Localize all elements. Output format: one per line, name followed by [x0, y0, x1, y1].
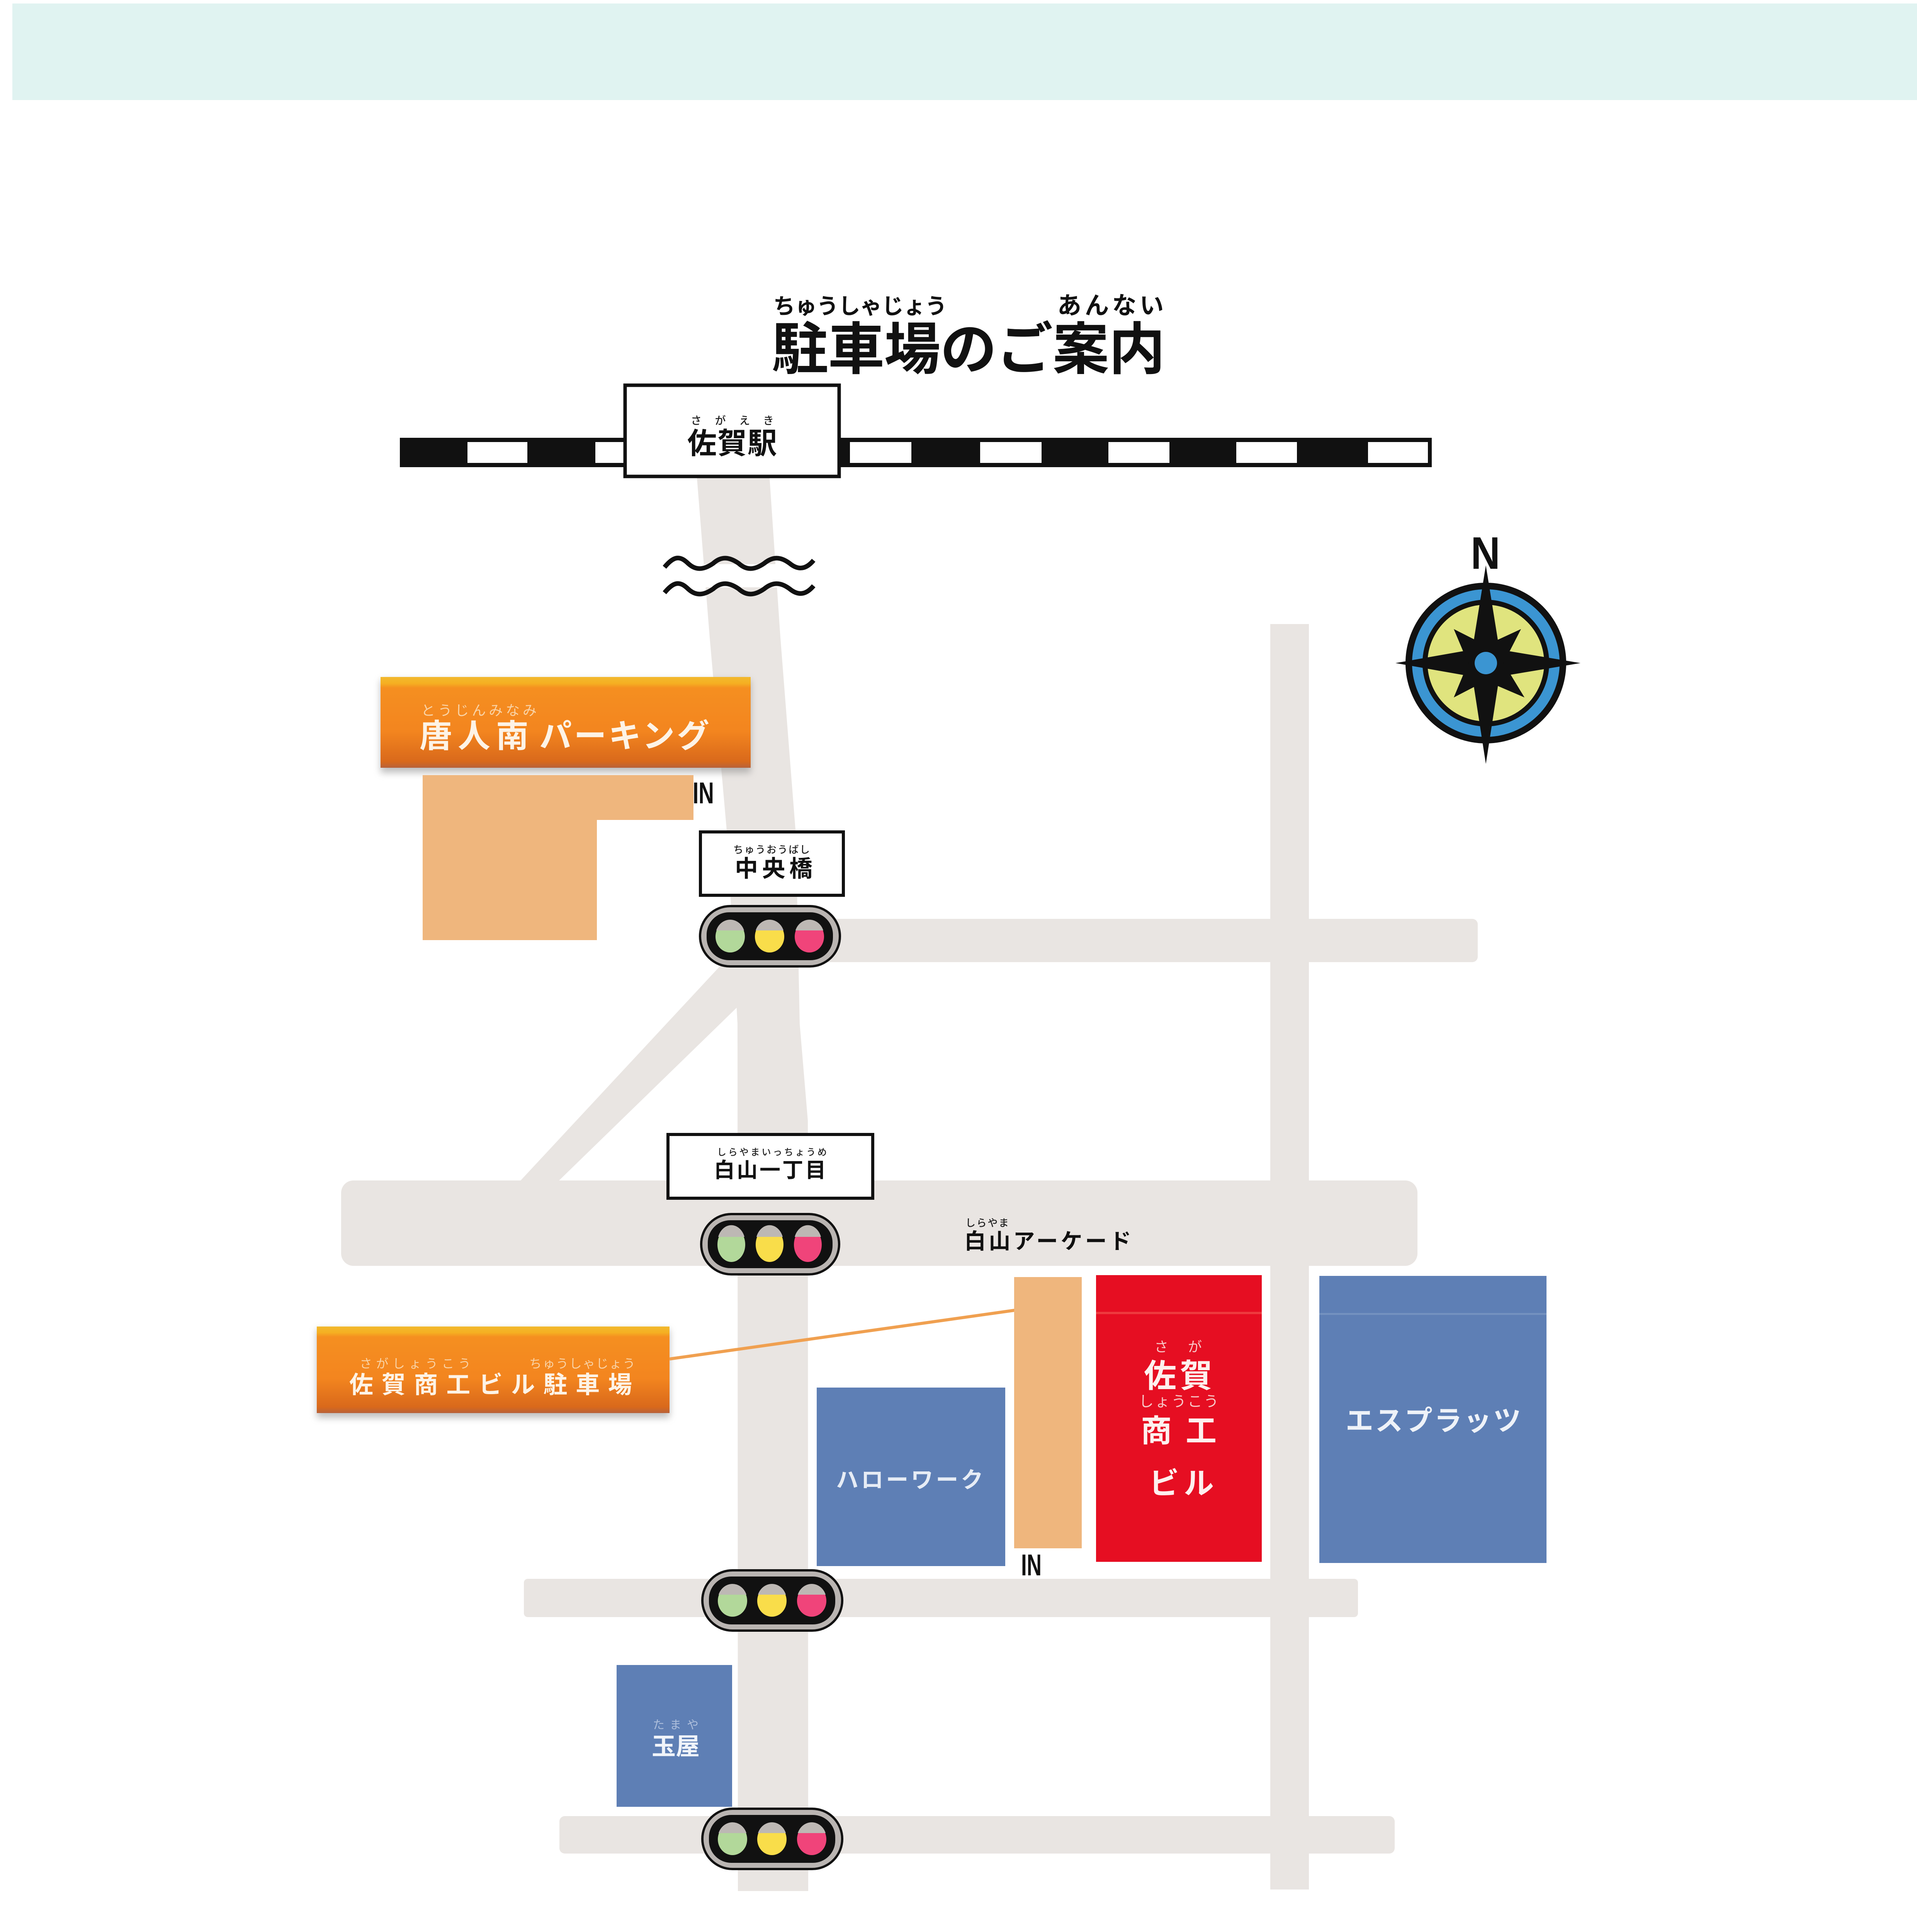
label: Saga Shoko Building Parking: 佐賀商工ビル駐車場 — [349, 1365, 632, 1400]
title: 駐車場のご案内 — [772, 304, 1165, 386]
label box: Shirayama 1-chome — [668, 1134, 873, 1198]
railway line — [400, 438, 1432, 467]
station box: Saga Station: さがえき — [691, 412, 774, 428]
top decorative band — [12, 3, 1917, 100]
building: Esplatz: エスプラッツ — [1346, 1398, 1521, 1439]
building: Tamaya: たまや — [653, 1715, 698, 1732]
parking lot: Saga Shoko Building — [1014, 1277, 1082, 1548]
compass: N — [1471, 528, 1500, 579]
building: Hello Work — [817, 1388, 1005, 1566]
label: Tojin-minami Parking: パーキング — [539, 710, 709, 757]
label box: Chuo-bashi: ちゅうおうばし — [733, 842, 810, 856]
parking lot: Tojin-minami — [423, 775, 693, 940]
label: Tojin-minami Parking — [381, 677, 751, 773]
building: Saga Shoko Building: ビル — [1149, 1459, 1214, 1503]
traffic light 4 — [702, 1809, 842, 1869]
building: Saga Shoko Building: さが — [1154, 1336, 1202, 1356]
station box: Saga Station: 佐賀駅 — [687, 420, 777, 462]
entrance mark IN (Saga Shoko): IN — [1021, 1548, 1042, 1582]
traffic light 3 — [702, 1570, 842, 1631]
building: Saga Shoko Building — [1096, 1275, 1262, 1562]
building: Tamaya: 玉屋 — [652, 1727, 700, 1762]
label box: Shirayama 1-chome: 白山一丁目 — [714, 1153, 826, 1184]
label box: Chuo-bashi — [700, 832, 843, 895]
label box: Shirayama 1-chome: しらやまいっちょうめ — [717, 1145, 827, 1158]
entrance mark IN (Tojin-minami): IN — [693, 776, 714, 810]
roads — [341, 478, 1478, 1891]
compass — [1395, 528, 1581, 764]
label: Saga Shoko Building Parking: さがしょうこう — [360, 1354, 471, 1372]
title: ちゅうしゃじょう — [773, 289, 947, 320]
road break marks — [664, 558, 814, 594]
building: Saga Shoko Building: しょうこう — [1139, 1389, 1219, 1411]
title: あんない — [1057, 286, 1164, 321]
station box: Saga Station — [625, 385, 839, 476]
building: Hello Work: ハローワーク — [836, 1462, 983, 1494]
building: Saga Shoko Building: 商工 — [1141, 1406, 1217, 1451]
label: Tojin-minami Parking: とうじんみなみ — [421, 699, 537, 719]
road label: Shirayama Arcade: 白山アーケード — [964, 1224, 1131, 1255]
leader line from label to parking — [670, 1310, 1015, 1359]
building: Esplatz — [1319, 1276, 1547, 1563]
road label: Shirayama Arcade: しらやま — [965, 1215, 1009, 1230]
label: Tojin-minami Parking: 唐人南 — [420, 710, 529, 757]
traffic light 2 — [701, 1214, 839, 1274]
label: Saga Shoko Building Parking: ちゅうしゃじょう — [529, 1354, 635, 1372]
building: Tamaya — [617, 1665, 732, 1807]
label: Saga Shoko Building Parking — [317, 1327, 670, 1418]
traffic light 1 — [700, 906, 840, 966]
label box: Chuo-bashi: 中央橋 — [735, 850, 812, 884]
building: Saga Shoko Building: 佐賀 — [1144, 1350, 1212, 1397]
